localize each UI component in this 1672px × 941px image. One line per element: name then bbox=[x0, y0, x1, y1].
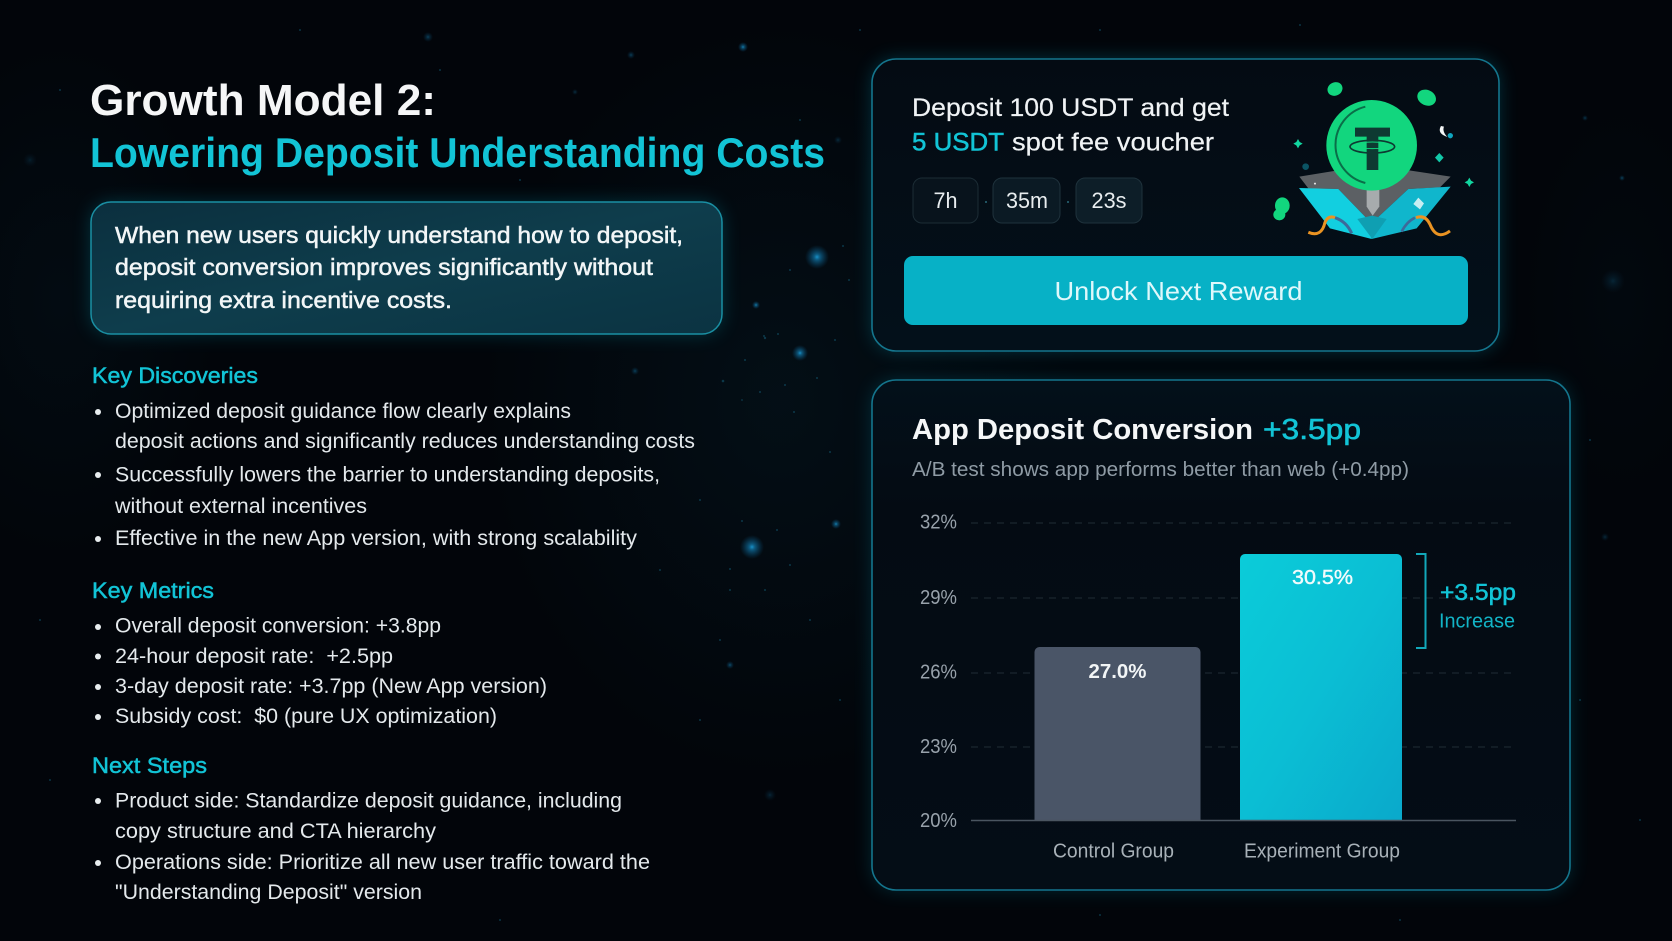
panel: app deposit conversion chart bbox=[872, 380, 1570, 890]
section: next steps bbox=[92, 753, 650, 904]
bar: experiment group 30.5%: 30.5% bbox=[1292, 566, 1353, 589]
callout: summary: requiring extra incentive costs. bbox=[115, 287, 452, 313]
section: key metrics: 3-day deposit rate: +3.7pp (New App version) bbox=[115, 674, 547, 698]
bracket and increase callout: +3.5pp bbox=[1440, 579, 1516, 605]
title: Growth Model 2: bbox=[90, 76, 436, 125]
section: key metrics: Key Metrics bbox=[92, 578, 214, 603]
bar: control group 27.0%: 27.0% bbox=[1088, 660, 1146, 683]
section: key discoveries: deposit actions and significantly reduces understanding costs bbox=[115, 429, 695, 453]
x axis labels bbox=[1053, 840, 1400, 862]
bar: experiment group 30.5% bbox=[1240, 554, 1402, 820]
bracket and increase callout: Increase bbox=[1439, 610, 1515, 632]
countdown timer: 23s bbox=[1092, 188, 1126, 213]
section: next steps: Operations side: Prioritize all new user traffic toward the bbox=[115, 850, 650, 874]
countdown timer: 7h bbox=[934, 188, 958, 213]
y axis labels: 29% bbox=[920, 587, 957, 609]
section: key discoveries: Effective in the new App version, with strong scalability bbox=[115, 526, 637, 550]
section: key metrics: Overall deposit conversion: +3.8pp bbox=[115, 614, 441, 638]
x axis labels: Experiment Group bbox=[1244, 840, 1400, 862]
icon: tether coin in gift box bbox=[1273, 80, 1474, 239]
callout: summary: When new users quickly understand how to deposit, bbox=[115, 222, 683, 248]
button: unlock next reward bbox=[904, 256, 1468, 325]
title bbox=[90, 76, 825, 176]
section: key metrics: Subsidy cost: $0 (pure UX optimization) bbox=[115, 704, 497, 728]
callout: summary bbox=[91, 202, 722, 334]
title: Lowering Deposit Understanding Costs bbox=[90, 129, 825, 176]
button: unlock next reward: Unlock Next Reward bbox=[1054, 276, 1302, 306]
section: key discoveries: Optimized deposit guidance flow clearly explains bbox=[115, 399, 571, 423]
section: key metrics: 24-hour deposit rate: +2.5pp bbox=[115, 644, 393, 668]
bracket and increase callout bbox=[1416, 554, 1516, 648]
section: next steps: "Understanding Deposit" version bbox=[115, 880, 422, 904]
section: key metrics bbox=[92, 578, 547, 728]
section: next steps: Next Steps bbox=[92, 753, 207, 778]
x axis labels: Control Group bbox=[1053, 840, 1174, 862]
reward subline: 5 USDT bbox=[912, 128, 1004, 156]
y axis labels: 32% bbox=[920, 512, 957, 534]
y axis labels: 20% bbox=[920, 810, 957, 832]
bar: control group 27.0% bbox=[1034, 647, 1200, 820]
section: key discoveries: without external incentives bbox=[114, 494, 367, 518]
countdown timer bbox=[913, 178, 1142, 223]
y axis labels: 26% bbox=[920, 662, 957, 684]
y axis labels bbox=[920, 512, 957, 832]
section: key discoveries: Successfully lowers the barrier to understanding deposits, bbox=[115, 462, 660, 486]
section: key discoveries: Key Discoveries bbox=[92, 363, 258, 388]
section: next steps: copy structure and CTA hierarchy bbox=[115, 819, 436, 843]
reward subline: spot fee voucher bbox=[1012, 128, 1214, 156]
section: key discoveries bbox=[92, 363, 695, 550]
callout: summary: deposit conversion improves significantly without bbox=[115, 254, 653, 280]
reward subline bbox=[912, 128, 1214, 156]
y axis labels: 23% bbox=[920, 736, 957, 758]
countdown timer: 35m bbox=[1006, 188, 1048, 213]
chart title: +3.5pp bbox=[1263, 414, 1361, 446]
reward headline: Deposit 100 USDT and get bbox=[912, 94, 1229, 122]
chart subtitle: A/B test shows app performs better than web (+0.4pp) bbox=[912, 458, 1409, 481]
panel: deposit reward bbox=[872, 59, 1499, 351]
chart title: App Deposit Conversion bbox=[912, 414, 1253, 446]
section: next steps: Product side: Standardize deposit guidance, including bbox=[115, 788, 622, 812]
